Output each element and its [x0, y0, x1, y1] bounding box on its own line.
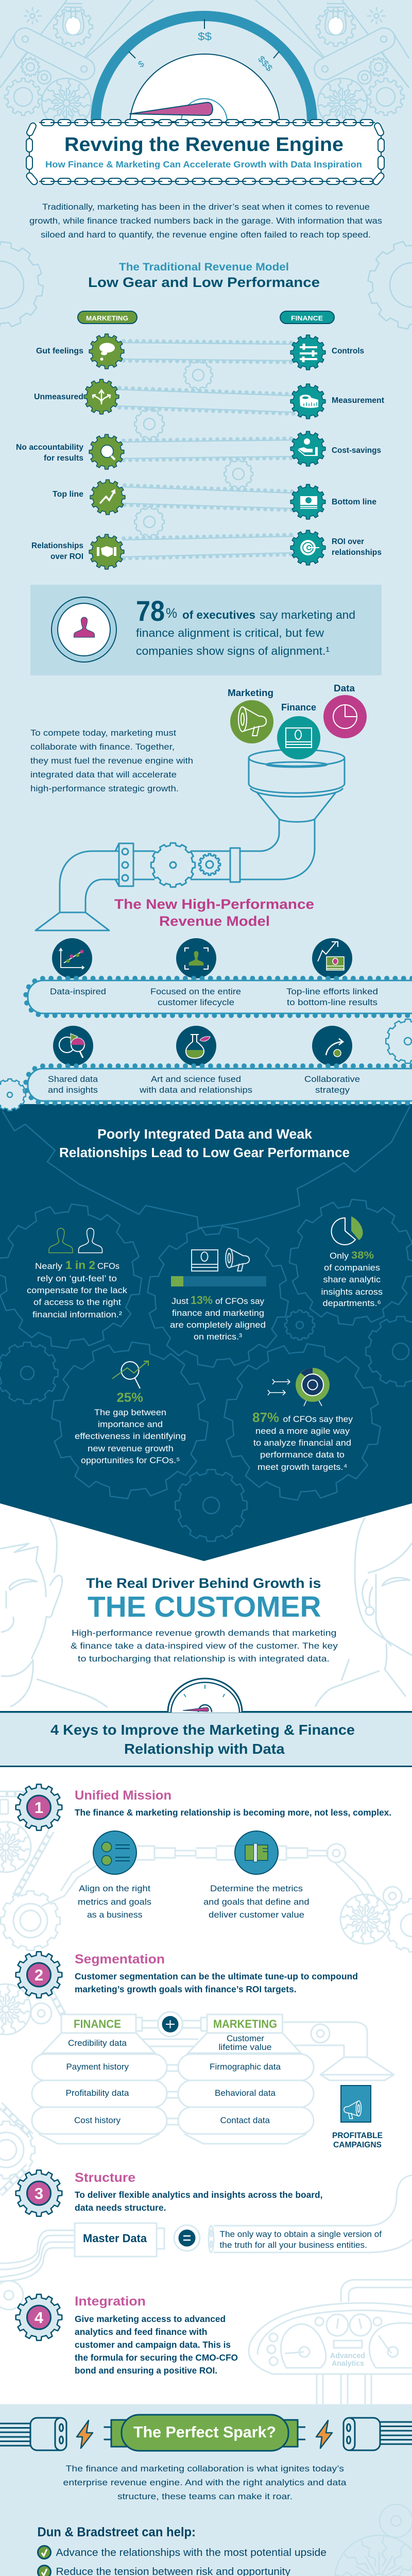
- funnel input: data: [323, 683, 367, 738]
- heading: poorly integrated: Relationships Lead to Low Gear Performance: [59, 1146, 350, 1160]
- text: only way: The only way to obtain a single version of: [219, 2230, 382, 2239]
- text: art and science: Art and science fused: [151, 1075, 241, 1084]
- heading: D&B can help: Dun & Bradstreet can help:: [37, 2525, 196, 2539]
- text: shared data: Shared data: [48, 1075, 98, 1084]
- text: give marketing access: customer and campaign data. This is: [75, 2340, 231, 2350]
- pipe cap: [209, 2226, 214, 2252]
- perfect spark plate: The Perfect Spark?: [133, 2423, 276, 2441]
- text: to compete today: To compete today, marketing must: [30, 728, 176, 738]
- text: determine the metrics: deliver customer value: [209, 1910, 304, 1920]
- label: top line: Top line: [53, 490, 83, 499]
- marketing data stack: [178, 2014, 314, 2144]
- row 5: relationships vs ROI: [31, 530, 382, 569]
- marketing labels: Firmographic data: [210, 2062, 281, 2072]
- callout text: companies show signs of alignment.¹: [136, 645, 330, 657]
- step 4: integration: [16, 2294, 412, 2376]
- text: to compete today: integrated data that will accelerate: [30, 770, 177, 779]
- drive belts: [117, 341, 294, 558]
- marketing labels: Customer: [227, 2034, 265, 2043]
- heading: the real driver: The Real Driver Behind Growth is: [86, 1575, 321, 1591]
- stat: 25% gap: 25%: [116, 1391, 143, 1405]
- pill: marketing: MARKETING: [86, 314, 128, 322]
- subtitle: How Finance & Marketing Can Accelerate Growth with Data Inspiration: [45, 159, 362, 170]
- stat: 1 in 2 CFOs: of access to the right: [33, 1298, 121, 1307]
- stat: 1 in 2 CFOs: Nearly: [35, 1262, 63, 1271]
- text: determine the metrics: and goals that define and: [203, 1897, 309, 1907]
- finance data stack: [32, 2014, 167, 2144]
- stat: 25% gap: [75, 1361, 186, 1465]
- icon: money: [192, 1250, 218, 1271]
- right side gear between belts: [386, 1019, 412, 1063]
- stat: percent sign: %: [166, 605, 177, 621]
- text: collaborative strategy: strategy: [315, 1086, 350, 1095]
- finance gear: tape measure: [290, 384, 325, 419]
- title: Revving the Revenue Engine: [64, 134, 344, 156]
- icon: two people: [49, 1228, 102, 1253]
- pill: marketing: [78, 311, 137, 324]
- finance labels: Cost history: [74, 2116, 121, 2125]
- finance gear: hand with coin: [290, 431, 325, 466]
- connector pipes: [136, 2018, 394, 2125]
- step 2: segmentation: [16, 1952, 394, 2149]
- text: give marketing access: bond and ensuring a positive ROI.: [75, 2365, 217, 2376]
- stat: 38% of companies: of companies: [324, 1263, 380, 1273]
- stat: 13% of CFOs: finance and marketing: [172, 1309, 264, 1318]
- heading: four keys: 4 Keys to Improve the Marketing & Finance: [50, 1722, 355, 1738]
- perfect spark plate: [104, 2415, 305, 2451]
- funnel input: finance: [277, 702, 320, 759]
- icons row two: [53, 1026, 352, 1066]
- label: no accountability for results: [16, 443, 83, 463]
- closing paragraph: [63, 2464, 347, 2501]
- finance labels: [66, 2018, 129, 2125]
- stat: 38% of companies: [321, 1216, 383, 1308]
- heading: poorly integrated: [59, 1127, 350, 1160]
- text: give marketing access: [75, 2314, 238, 2376]
- heading: four keys: Relationship with Data: [124, 1741, 285, 1757]
- text: customer segmentation: marketing’s growth goals with finance’s ROI targets.: [75, 1984, 297, 1994]
- idler gears: [134, 361, 253, 537]
- marketing labels: Behavioral data: [215, 2089, 276, 2098]
- icon: person in ring: [52, 597, 116, 662]
- heading: poorly integrated: Poorly Integrated Data and Weak: [97, 1127, 313, 1142]
- customer paragraph: & finance take a data-inspired view of the customer. The key: [71, 1641, 338, 1651]
- label: bottom line: Bottom line: [332, 498, 376, 506]
- label: ROI over relationships: ROI over: [332, 537, 364, 546]
- icon: megaphone: [226, 1248, 249, 1271]
- tile: profitable campaigns: CAMPAIGNS: [333, 2141, 382, 2149]
- decorative faces: [0, 1517, 412, 1707]
- finance gear: cash: [290, 484, 325, 519]
- icons row one: [52, 938, 352, 978]
- stat: 1 in 2 CFOs: CFOs: [97, 1262, 119, 1271]
- gauge needle: [130, 103, 213, 115]
- row 2: unmeasured vs measurement: [34, 379, 384, 419]
- icon: data chart: [52, 938, 92, 978]
- icon: pie chart: [332, 1216, 363, 1245]
- marketing labels: lifetime value: [218, 2043, 272, 2052]
- text: flexible analytics: To deliver flexible analytics and insights across the board,: [75, 2190, 322, 2200]
- tile: profitable campaigns: PROFITABLE: [332, 2131, 383, 2140]
- stat: 13% of CFOs: 13%: [191, 1294, 213, 1307]
- stat: 38% of companies: share analytic: [323, 1275, 381, 1284]
- label: advanced analytics: Analytics: [332, 2359, 364, 2368]
- gauge label: $$$: $$$: [256, 54, 274, 74]
- stat: 87% of CFOs: need a more agile way: [255, 1427, 350, 1436]
- icon: magnifier and trend: [112, 1361, 148, 1388]
- text: relationship: The finance & marketing relationship is becoming more, not less, complex.: [75, 1807, 391, 1818]
- pill: finance: [280, 311, 334, 324]
- background: white page: [0, 1108, 412, 2576]
- text: flexible analytics: data needs structure.: [75, 2202, 166, 2213]
- text: align on metrics: Align on the right: [79, 1884, 150, 1893]
- text: align on metrics: [78, 1884, 151, 1920]
- text: focused on customer lifecycle: customer lifecycle: [158, 998, 234, 1007]
- stat: 87% of CFOs: [252, 1368, 353, 1472]
- closing paragraph: enterprise revenue engine. And with the right analytics and data: [63, 2478, 347, 2487]
- closing paragraph: The finance and marketing collaboration is what ignites today’s: [66, 2464, 344, 2473]
- decorative machinery behind gauge: [0, 0, 409, 128]
- marketing labels: Contact data: [220, 2116, 270, 2125]
- text: data-inspired: Data-inspired: [50, 987, 106, 996]
- master data box: [75, 2223, 164, 2257]
- dark section: poorly integrated data: [0, 1104, 412, 1561]
- heading: traditional revenue model: [88, 261, 320, 290]
- label: ROI over relationships: [332, 537, 382, 557]
- icon: target with arrows: [268, 1368, 330, 1406]
- master data box: Master Data: [83, 2232, 147, 2245]
- intro paragraph: [29, 202, 382, 240]
- stat: 13% of CFOs: are completely aligned: [170, 1320, 266, 1330]
- finance gear: sliders: [290, 335, 325, 370]
- intro paragraph: growth, while finance tracked numbers back in the garage. With information that was: [29, 216, 382, 226]
- decorative large side gears: [0, 233, 412, 337]
- text: determine the metrics: [203, 1884, 309, 1920]
- stat: 87% of CFOs: 87%: [252, 1410, 279, 1425]
- label: advanced analytics: [330, 2351, 365, 2368]
- text: collaborative strategy: Collaborative: [304, 1075, 360, 1084]
- gear number 1: [16, 1784, 62, 1831]
- stat: 25% gap: importance and: [98, 1420, 163, 1429]
- text: give marketing access: the formula for securing the CMO-CFO: [75, 2352, 238, 2363]
- stat: 1 in 2 CFOs: rely on ‘gut-feel’ to: [37, 1274, 117, 1283]
- stat: 25% gap: The gap between: [94, 1408, 166, 1417]
- marketing gear: thought bubble: [89, 334, 124, 369]
- callout: 78% of executives: [30, 585, 382, 675]
- label: relationships over ROI: over ROI: [50, 552, 83, 561]
- icon: collaborative strategy: [312, 1026, 352, 1066]
- stat: 1 in 2 CFOs: [27, 1228, 128, 1319]
- text: flexible analytics: [75, 2190, 322, 2213]
- heading: new high-performance model: The New High-Performance: [114, 896, 314, 912]
- background: light blue top section: [0, 0, 412, 1108]
- stat: 25% gap: effectiveness in identifying: [75, 1432, 186, 1441]
- stat: 13% of CFOs: [170, 1248, 266, 1342]
- stat: 78%: 78: [136, 595, 165, 627]
- icon: checklist: [93, 1831, 136, 1874]
- marketing gear: magnifier: [89, 434, 124, 469]
- gear number 2: 2: [35, 1966, 43, 1984]
- text: only way: [219, 2230, 382, 2250]
- stat: 13% of CFOs: on metrics.³: [194, 1332, 243, 1342]
- small gear at belt two: [0, 1079, 26, 1111]
- funnel input: marketing: [228, 688, 273, 743]
- mini gauge: [168, 1679, 242, 1713]
- label: advanced analytics: Advanced: [330, 2351, 365, 2360]
- decorative machinery in keys section: [0, 1794, 412, 2404]
- stat: 87% of CFOs: performance data to: [260, 1450, 345, 1460]
- finance labels: Payment history: [66, 2062, 129, 2072]
- progress bar: [171, 1276, 266, 1286]
- revenue gauge: [96, 16, 312, 122]
- icon: spark left: [77, 2420, 93, 2448]
- stat: 1 in 2 CFOs: financial information.²: [32, 1310, 123, 1319]
- text: to compete today: [30, 728, 193, 793]
- stat: 25% gap: new revenue growth: [88, 1444, 174, 1453]
- text: top-line efforts: to bottom-line results: [287, 998, 377, 1007]
- funnel input: data: Data: [334, 683, 355, 693]
- label: unmeasured: Unmeasured: [34, 393, 83, 401]
- icon: customer lifecycle: [176, 938, 216, 978]
- callout text: finance alignment is critical, but few: [136, 626, 324, 639]
- stat: 87% of CFOs: to analyze financial and: [253, 1438, 351, 1448]
- text: shared data: and insights: [48, 1086, 98, 1095]
- stat: 25% gap: opportunities for CFOs.⁵: [81, 1456, 180, 1465]
- callout text: [136, 608, 355, 657]
- dashboard illustration: [249, 2303, 412, 2374]
- gauge label: $: $: [136, 59, 146, 70]
- text: top-line efforts: Top-line efforts linked: [286, 987, 378, 996]
- text: align on metrics: as a business: [87, 1910, 142, 1920]
- closing light section: [0, 2404, 412, 2576]
- icon: shared data: [53, 1026, 93, 1066]
- stat: 1 in 2 CFOs: compensate for the lack: [27, 1286, 128, 1295]
- step 1: unified mission: [16, 1784, 391, 1920]
- check item 1: Advance the relationships with the most potential upside: [56, 2547, 327, 2558]
- tile: profitable campaigns: [332, 2086, 383, 2149]
- checklist: [38, 2546, 327, 2576]
- background gears: [0, 1106, 412, 1541]
- label: gut feelings: Gut feelings: [36, 347, 83, 355]
- heading: unified mission: Unified Mission: [75, 1788, 171, 1803]
- text: collaborative strategy: [304, 1075, 360, 1095]
- stat: 87% of CFOs: meet growth targets.⁴: [258, 1463, 347, 1472]
- text: to compete today: they must fuel the revenue engine with: [30, 756, 193, 766]
- gear number 3: [16, 2170, 62, 2216]
- heading: the customer: THE CUSTOMER: [88, 1590, 321, 1623]
- stat: 13% of CFOs: Just: [171, 1297, 188, 1306]
- funnel input: finance: Finance: [281, 702, 316, 713]
- customer paragraph: [71, 1628, 338, 1664]
- icon: money detail: [192, 1252, 218, 1267]
- customer paragraph: High-performance revenue growth demands that marketing: [72, 1628, 337, 1638]
- belt two: [26, 1066, 412, 1103]
- closing paragraph: structure, these teams can make it roar.: [117, 2492, 293, 2501]
- text: determine the metrics: Determine the metrics: [210, 1884, 303, 1893]
- heading: integration: Integration: [75, 2294, 146, 2309]
- title plate with chain border: [25, 118, 385, 186]
- label: controls: Controls: [332, 347, 364, 355]
- heading: segmentation: Segmentation: [75, 1952, 165, 1967]
- marketing labels: [210, 2018, 281, 2125]
- heading: structure: Structure: [75, 2171, 135, 2185]
- marketing gear: branching arrows: [84, 379, 119, 414]
- label: no accountability for results: No accountability: [16, 443, 83, 452]
- text: focused on customer lifecycle: Focused on the entire: [150, 987, 241, 996]
- text: give marketing access: analytics and feed finance with: [75, 2327, 207, 2337]
- finance labels: FINANCE: [74, 2018, 121, 2030]
- row 1: gut feelings vs controls: [36, 334, 364, 370]
- gear number 4: [16, 2294, 62, 2341]
- text: give marketing access: Give marketing access to advanced: [75, 2314, 226, 2324]
- label: measurement: Measurement: [332, 396, 384, 405]
- text: only way: the truth for all your business entities.: [219, 2241, 367, 2250]
- funnel and pipe: [36, 750, 345, 930]
- gear number 1: 1: [35, 1799, 43, 1817]
- icon: book: [235, 1831, 278, 1874]
- heading: new high-performance model: Revenue Model: [159, 913, 270, 929]
- finance labels: Credibility data: [68, 2039, 127, 2048]
- gear number 4: 4: [35, 2309, 44, 2327]
- decorative turbine: [335, 2504, 412, 2576]
- text: art and science: [139, 1075, 252, 1095]
- right plug: [344, 2418, 412, 2450]
- icon: art and science flask: [176, 1026, 216, 1066]
- text: customer segmentation: [75, 1971, 358, 1994]
- belt one: [26, 978, 412, 1015]
- icon: top-line efforts: [312, 938, 352, 978]
- stat: 38% of companies: insights across: [321, 1287, 383, 1297]
- heading: new high-performance model: [114, 896, 314, 929]
- stat: 38% of companies: 38%: [351, 1250, 374, 1261]
- intro paragraph: siloed and hard to quantify, the revenue engine often failed to reach top speed.: [41, 230, 371, 240]
- gear number 3: 3: [35, 2184, 43, 2202]
- text: to compete today: high-performance strategic growth.: [30, 784, 179, 793]
- text: art and science: with data and relationships: [139, 1086, 252, 1095]
- text: shared data: [48, 1075, 98, 1095]
- finance gear: target: [290, 530, 325, 565]
- stat: 13% of CFOs: of CFOs say: [215, 1297, 265, 1306]
- equals sign: [174, 2225, 200, 2251]
- label: ROI over relationships: relationships: [332, 548, 382, 557]
- row 3: no accountability vs cost-savings: [16, 431, 381, 469]
- stat: 87% of CFOs: of CFOs say they: [283, 1415, 353, 1424]
- heading: traditional revenue model: The Traditional Revenue Model: [119, 261, 289, 273]
- marketing labels: MARKETING: [213, 2018, 277, 2030]
- left plug: [0, 2418, 66, 2450]
- text: top-line efforts: [286, 987, 378, 1007]
- label: relationships over ROI: Relationships: [31, 541, 83, 550]
- gear number 2: [16, 1952, 62, 1998]
- heading: traditional revenue model: Low Gear and Low Performance: [88, 275, 320, 290]
- marketing gear: rising arrow: [90, 480, 125, 515]
- gauge label: $$: $$: [198, 31, 212, 43]
- step 3: structure: [16, 2170, 382, 2257]
- funnel input: marketing: Marketing: [228, 688, 273, 698]
- pill: finance: FINANCE: [291, 314, 323, 322]
- row 4: top line vs bottom line: [53, 480, 376, 519]
- text: to compete today: collaborate with finance. Together,: [30, 742, 175, 752]
- finance labels: Profitability data: [66, 2089, 129, 2098]
- stat: 38% of companies: departments.⁶: [322, 1299, 381, 1308]
- text: align on metrics: metrics and goals: [78, 1897, 151, 1907]
- intro paragraph: Traditionally, marketing has been in the driver’s seat when it comes to revenue: [42, 202, 370, 212]
- marketing gear: handshake: [89, 534, 124, 569]
- heading: four keys: [50, 1722, 355, 1757]
- label: cost-savings: Cost-savings: [332, 446, 381, 455]
- text: customer segmentation: Customer segmentation can be the ultimate tune-up to compound: [75, 1971, 358, 1981]
- stat: 38% of companies: Only: [330, 1251, 349, 1261]
- plus sign: [158, 2012, 182, 2037]
- callout text: of executives: [182, 608, 255, 621]
- text: focused on customer lifecycle: [150, 987, 241, 1007]
- label: no accountability for results: for results: [44, 454, 83, 463]
- band: four keys: [0, 1679, 412, 1767]
- callout text: say marketing and: [260, 608, 355, 621]
- stat: 1 in 2 CFOs: 1 in 2: [65, 1259, 95, 1272]
- customer paragraph: to turbocharging that relationship is with integrated data.: [78, 1654, 330, 1664]
- label: relationships over ROI: [31, 541, 83, 561]
- icon: spark right: [316, 2420, 332, 2448]
